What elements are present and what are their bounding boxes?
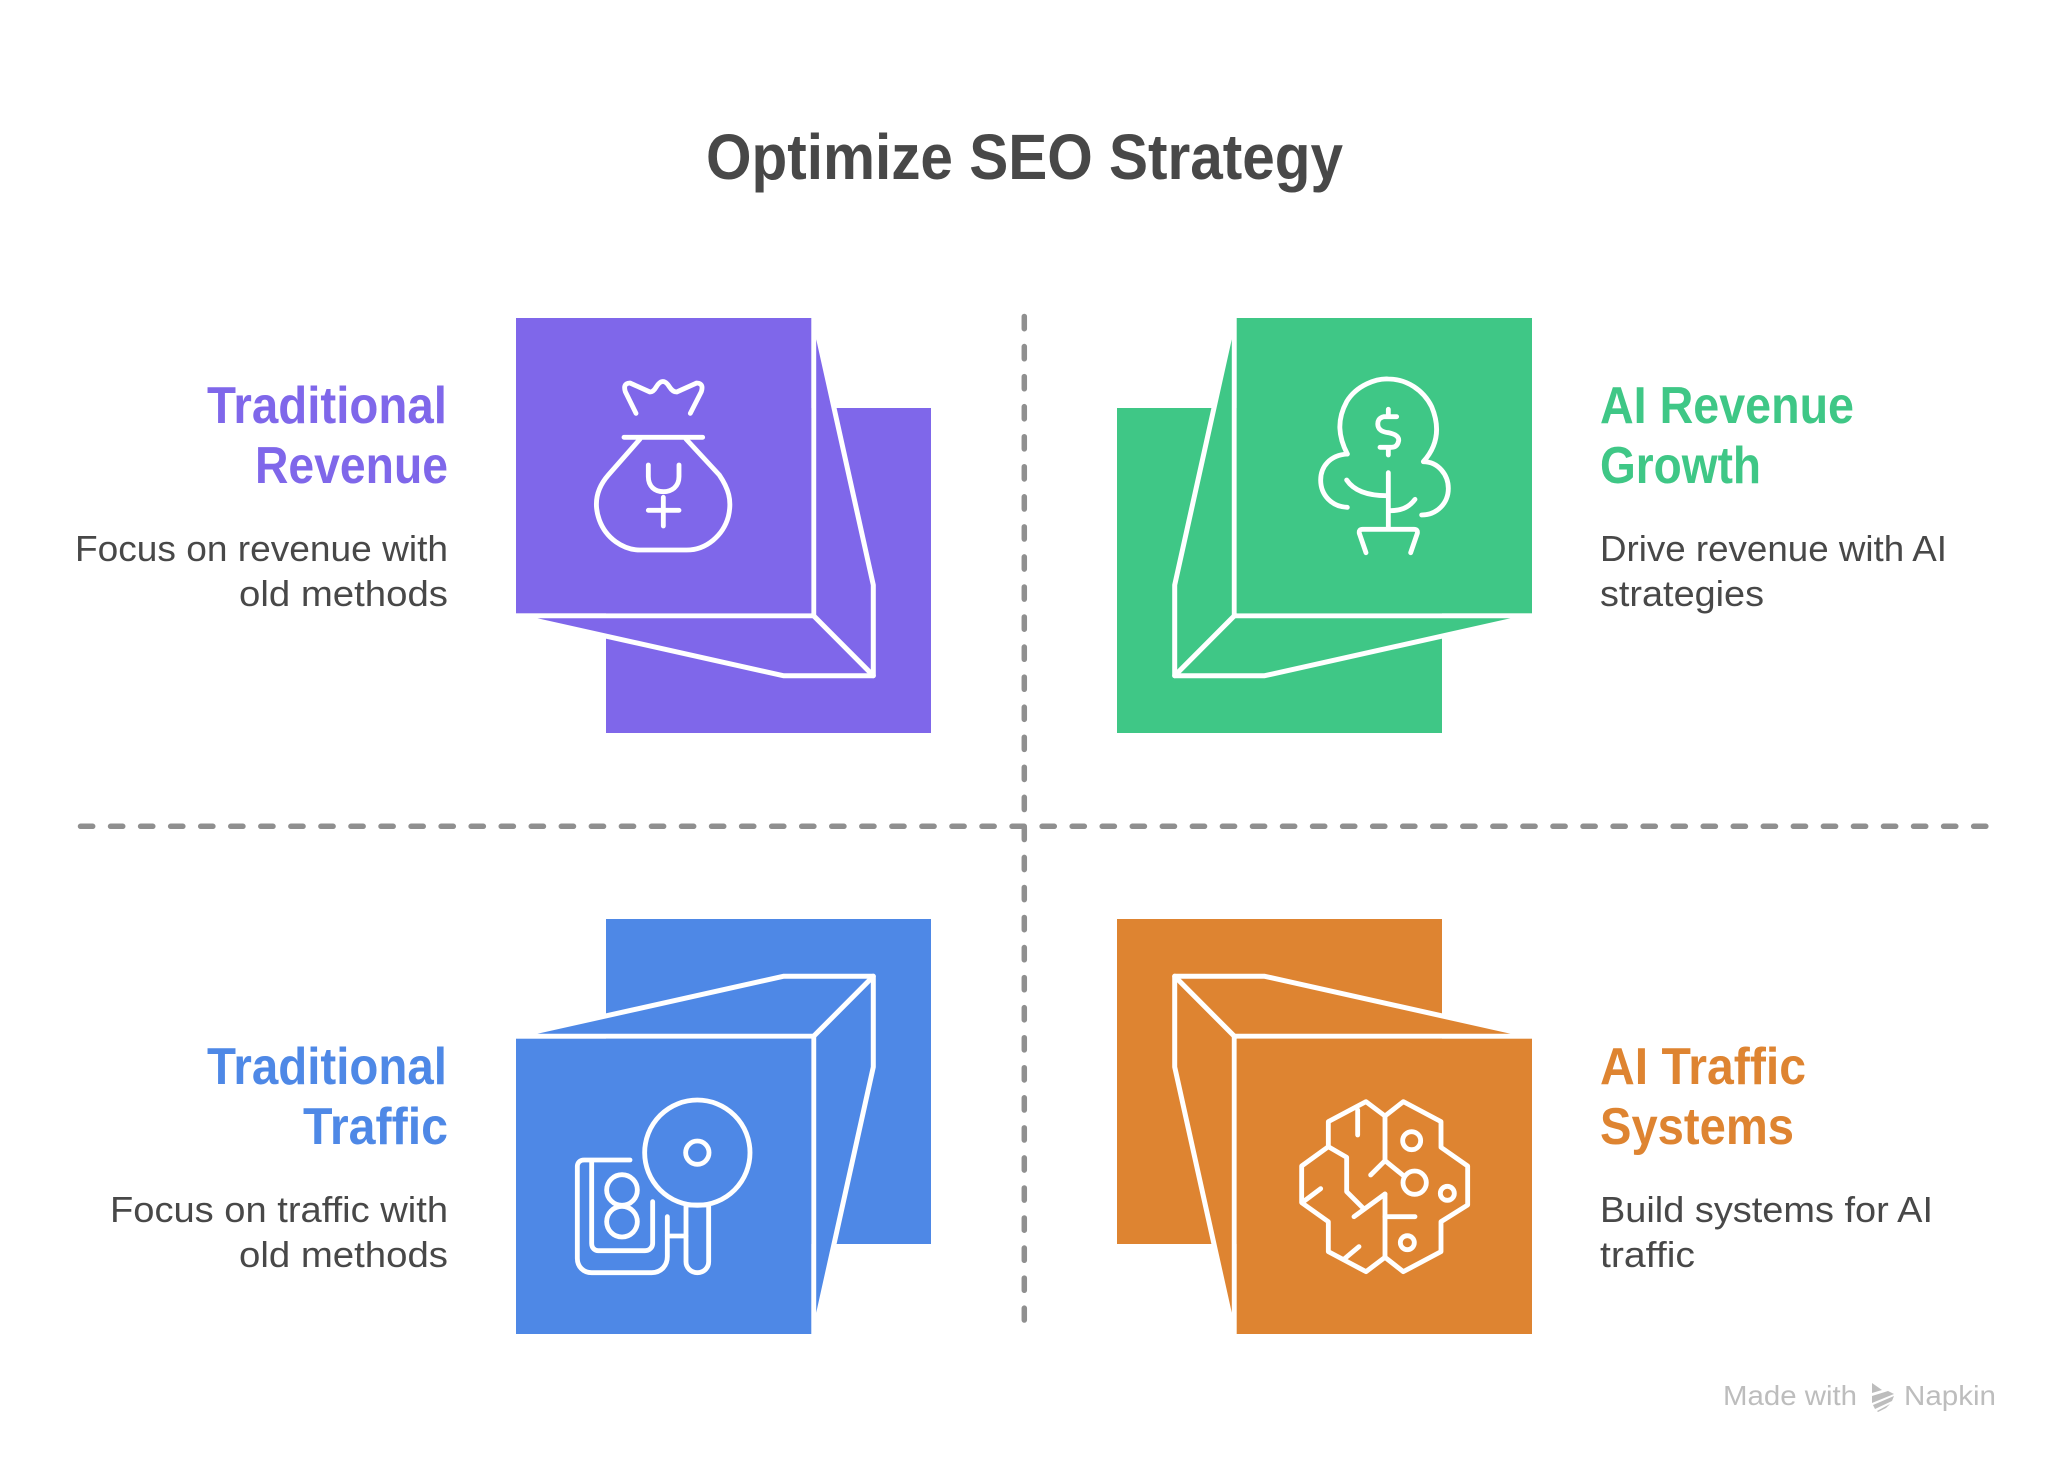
heading and description: AI revenue growth: AI Revenue: [1600, 377, 1854, 435]
heading and description: AI revenue growth: Growth: [1600, 437, 1761, 495]
heading and description: traditional revenue: Revenue: [255, 437, 448, 495]
heading and description: AI revenue growth: Drive revenue with AI: [1600, 528, 1947, 569]
icon: money tree: [1321, 379, 1448, 553]
title: Optimize SEO Strategy: [706, 121, 1343, 193]
panel: AI revenue growth: [1117, 316, 1947, 733]
heading and description: traditional revenue: Focus on revenue with: [75, 528, 448, 569]
3D block: orange: [1117, 919, 1533, 1336]
icon: circuit brain: [1302, 1102, 1468, 1272]
icon: magnifier and document: [577, 1100, 750, 1273]
heading and description: traditional traffic: Traditional: [207, 1038, 447, 1096]
heading and description: traditional traffic: Traffic: [303, 1098, 448, 1156]
watermark: made with napkin: Made with: [1723, 1380, 1857, 1411]
heading and description: AI revenue growth: strategies: [1600, 573, 1764, 614]
panel: traditional revenue: [75, 316, 931, 733]
watermark: made with napkin: Napkin: [1904, 1380, 1996, 1411]
heading and description: AI traffic systems: traffic: [1600, 1234, 1695, 1275]
horizontal dashed divider: [80, 824, 1992, 829]
heading and description: AI traffic systems: [1600, 1038, 1933, 1275]
heading and description: traditional traffic: old methods: [239, 1234, 448, 1275]
vertical dashed divider: [1022, 316, 1027, 1320]
heading and description: traditional revenue: Traditional: [207, 377, 447, 435]
icon: napkin logo: [1872, 1383, 1894, 1412]
heading and description: traditional traffic: Focus on traffic with: [110, 1189, 448, 1230]
heading and description: AI revenue growth: [1600, 377, 1947, 614]
heading and description: AI traffic systems: AI Traffic: [1600, 1038, 1806, 1096]
3D block: blue: [515, 919, 931, 1336]
icon: money bag: [596, 381, 730, 550]
heading and description: AI traffic systems: Build systems for AI: [1600, 1189, 1933, 1230]
heading and description: AI traffic systems: Systems: [1600, 1098, 1794, 1156]
panel: traditional traffic: [110, 919, 931, 1336]
heading and description: traditional traffic: [110, 1038, 448, 1275]
3D block: green: [1117, 316, 1533, 733]
3D block: purple: [515, 316, 931, 733]
panel: AI traffic systems: [1117, 919, 1933, 1336]
heading and description: traditional revenue: old methods: [239, 573, 448, 614]
watermark: made with napkin: [1723, 1380, 1996, 1412]
heading and description: traditional revenue: [75, 377, 448, 614]
